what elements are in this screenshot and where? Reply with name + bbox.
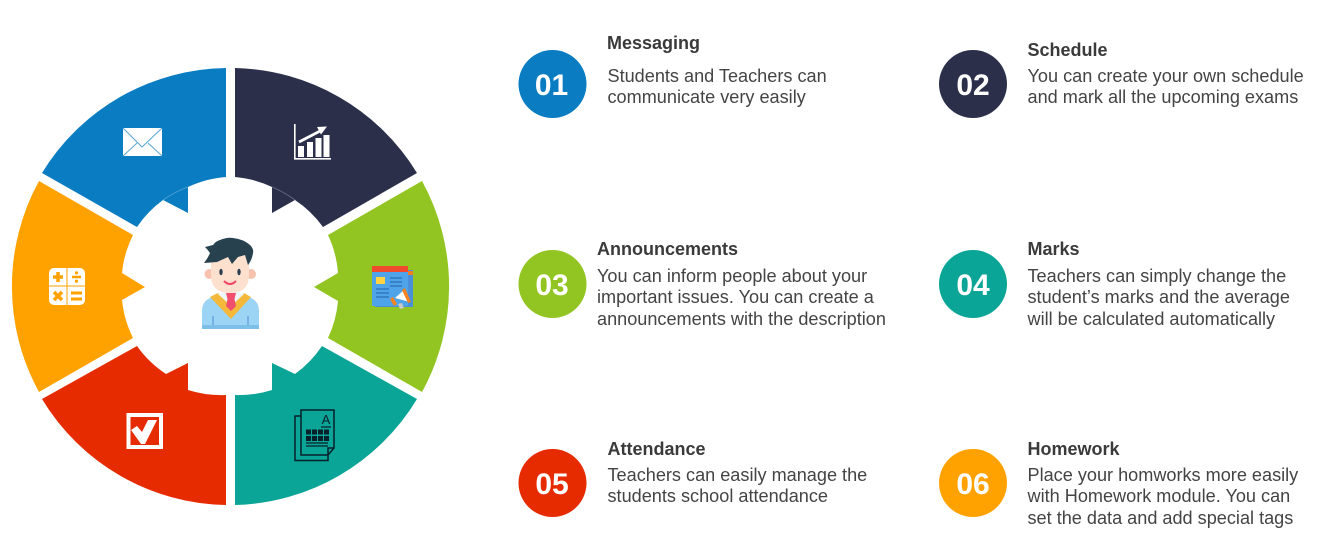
badge 01 [518,50,586,118]
description: homework: Place your homworks more easily [1028,465,1299,485]
description: schedule: and mark all the upcoming exams [1028,87,1298,107]
item 03: announcements [518,239,886,329]
badge 01: 01 [535,69,568,102]
description: announcements: important issues. You can create a [597,287,875,307]
badge 04: 04 [956,269,990,302]
item 06: homework [939,439,1299,528]
item 02: schedule [939,40,1304,118]
heading: Attendance: Attendance [608,439,706,459]
badge 06 [939,449,1007,517]
segment: marks (teal) [235,346,417,505]
heading: Announcements: Announcements [597,239,738,259]
heading: Marks: Marks [1028,239,1080,259]
description: marks: will be calculated automatically [1026,309,1276,329]
description: attendance: students school attendance [608,486,828,506]
segment: messaging (blue) [42,68,226,227]
segment: schedule (navy) [235,68,417,227]
segment: attendance (red) [42,346,226,505]
description: marks: student’s marks and the average [1028,287,1290,307]
segment: homework (orange) [12,181,145,392]
badge 06: 06 [956,468,990,501]
icon: checkbox [128,415,161,447]
icon: calculator [49,268,85,305]
description: announcements: You can inform people about your [597,266,867,286]
badge 03 [518,250,586,318]
badge 02: 02 [956,69,990,102]
heading: Messaging: Messaging [607,33,700,53]
description: attendance: Teachers can easily manage the [608,465,867,485]
item 01: messaging [518,33,827,118]
icon: graded paper [295,410,334,460]
badge 03: 03 [535,269,569,302]
icon: student avatar [202,238,259,329]
description: messaging: Students and Teachers can [608,66,827,86]
heading: Schedule: Schedule [1028,40,1108,60]
description: homework: set the data and add special tags [1028,508,1293,528]
description: schedule: You can create your own schedule [1028,66,1304,86]
segment: announcements (green) [314,181,449,392]
badge 02 [939,50,1007,118]
item 05: attendance [518,439,867,517]
description: announcements: announcements with the description [597,309,886,329]
badge 05: 05 [535,468,569,501]
heading: Homework: Homework [1028,439,1121,459]
icon: graded paper: A [322,412,331,427]
item 04: marks [939,239,1290,329]
icon: growth chart [295,124,331,159]
badge 05 [518,449,586,517]
wheel diagram [12,68,449,505]
icon: announcement board [372,266,413,309]
icon: envelope [123,128,162,156]
description: marks: Teachers can simply change the [1028,266,1286,286]
description: homework: with Homework module. You can [1026,486,1290,506]
description: messaging: communicate very easily [608,87,807,107]
badge 04 [939,250,1007,318]
